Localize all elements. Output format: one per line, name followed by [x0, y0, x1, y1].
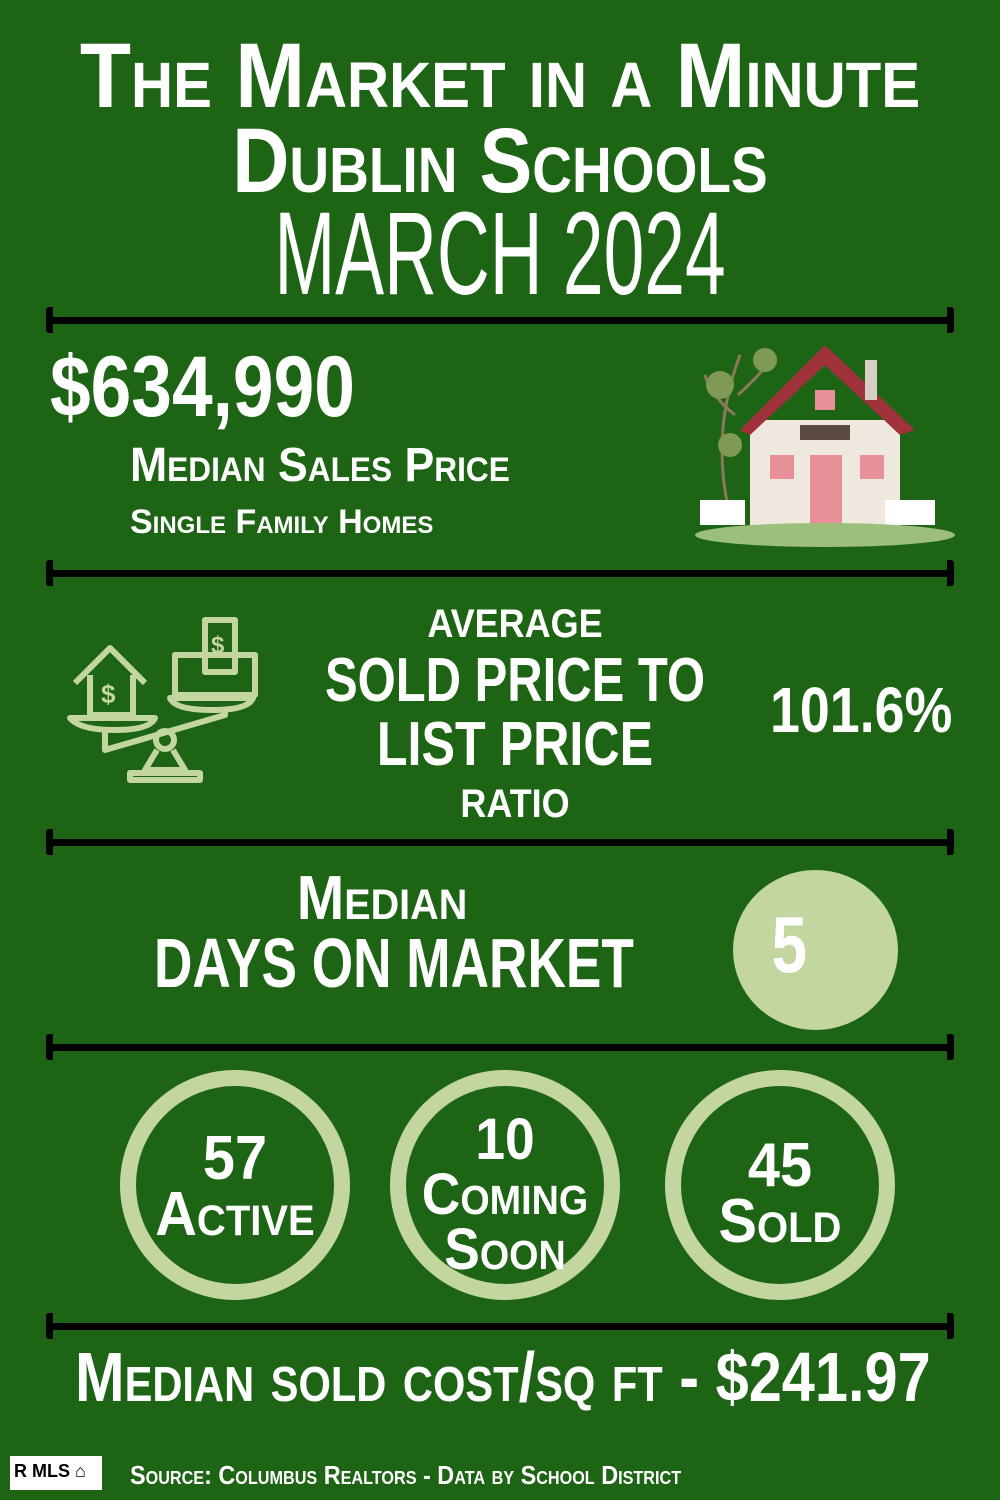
icon: house	[695, 345, 955, 547]
days on market label	[154, 864, 634, 1002]
median price label: Median Sales Price	[130, 439, 510, 492]
logos: R MLS ⌂	[14, 1461, 86, 1481]
subtext: Single Family Homes	[130, 503, 433, 541]
days on market label: Median	[297, 864, 467, 933]
ring: active: 57	[203, 1124, 267, 1193]
ratio label: LIST PRICE	[377, 710, 653, 779]
source: Source: Columbus Realtors - Data by School District	[130, 1460, 681, 1490]
icon: scale: $	[101, 679, 116, 709]
ring: sold: 45	[748, 1131, 812, 1200]
ring: coming soon: Coming	[422, 1162, 588, 1227]
ring: active	[120, 1070, 350, 1300]
date: MARCH 2024	[274, 188, 726, 320]
icon: scale	[67, 617, 258, 783]
subtitle: Dublin Schools	[232, 110, 768, 212]
ratio label: SOLD PRICE TO	[325, 646, 705, 715]
days on market label: DAYS ON MARKET	[154, 924, 634, 1002]
ring: sold	[665, 1070, 895, 1300]
cost per sq ft: Median sold cost/sq ft - $241.97	[75, 1338, 931, 1416]
icon: scale: $	[211, 632, 225, 659]
ratio label: RATIO	[460, 782, 570, 826]
ratio label: AVERAGE	[427, 602, 603, 646]
title: The Market in a Minute	[80, 25, 920, 127]
ring: active: Active	[155, 1180, 315, 1249]
ring: coming soon	[390, 1070, 620, 1300]
ring: sold: Sold	[719, 1187, 841, 1256]
ring: coming soon: Soon	[444, 1217, 566, 1282]
ratio label	[325, 602, 705, 826]
ratio value: 101.6%	[770, 674, 952, 746]
days badge	[733, 870, 898, 1030]
median price value: $634,990	[50, 339, 355, 435]
days badge: 5	[771, 900, 807, 989]
logos	[10, 1456, 102, 1490]
ring: coming soon: 10	[475, 1107, 535, 1172]
